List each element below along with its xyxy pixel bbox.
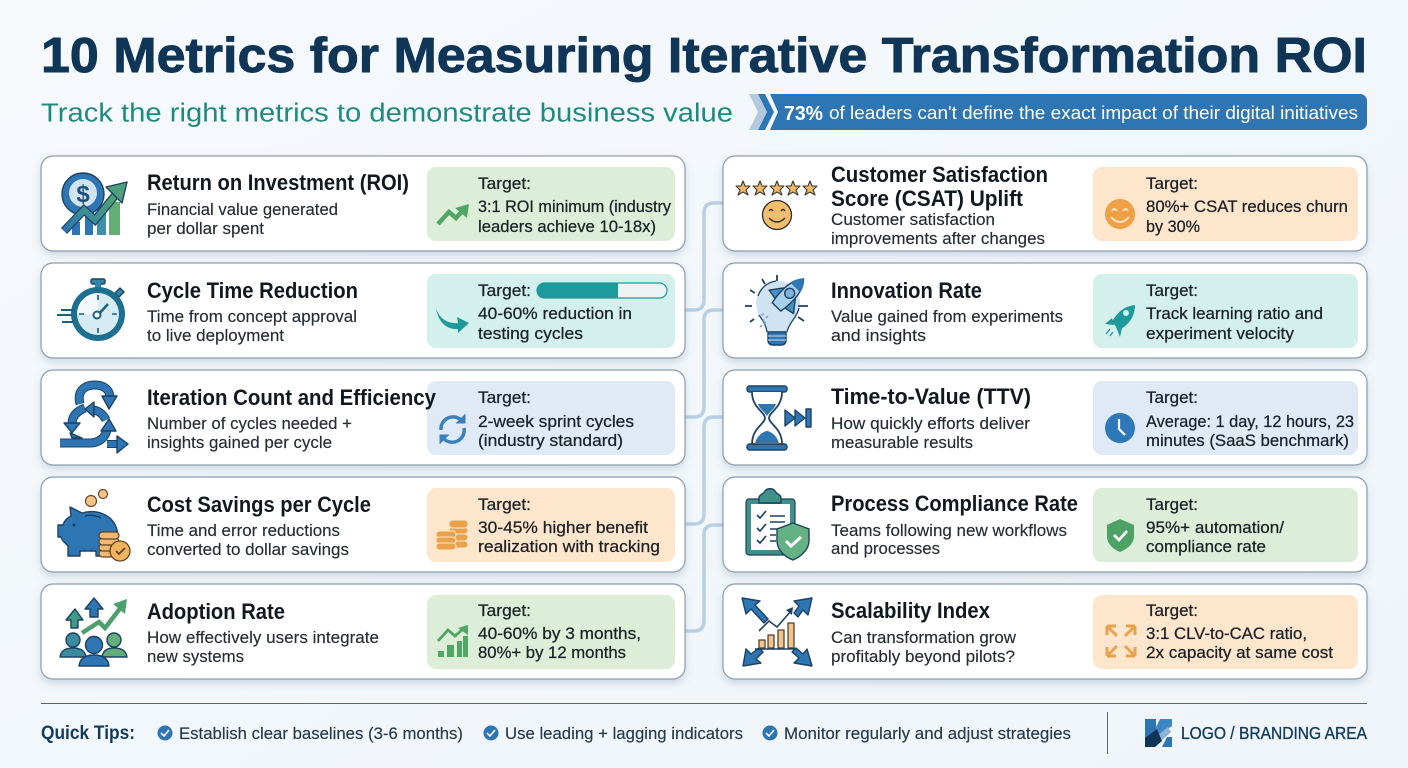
- icon: expand arrows: [1107, 626, 1135, 656]
- callout banner: 73%: [784, 103, 823, 125]
- logo and branding: LOGO / BRANDING AREA: [1181, 723, 1367, 743]
- icon: coin stacks: [436, 520, 468, 550]
- tip 1: Establish clear baselines (3-6 months): [179, 725, 463, 743]
- target box: [1093, 595, 1358, 669]
- subtitle: Track the right metrics to demonstrate business value: [41, 100, 733, 128]
- target box: 95%+ automation/: [1146, 519, 1284, 537]
- target box: experiment velocity: [1146, 325, 1295, 343]
- icon: coin and growth arrow: $: [76, 181, 90, 208]
- title: 10 Metrics for Measuring Iterative Transformation ROI: [41, 29, 1367, 83]
- target box: leaders achieve 10-18x): [478, 218, 656, 236]
- footer divider: [41, 702, 1367, 704]
- metric description: [147, 308, 357, 345]
- metric description: and insights: [831, 327, 926, 345]
- card: Cycle Time Reduction: [41, 263, 685, 358]
- metric description: Customer satisfaction: [831, 211, 995, 229]
- icon: hourglass with fast-forward: [747, 386, 811, 450]
- callout banner: of leaders can't define the exact impact of their digital initiatives: [829, 103, 1358, 123]
- metric description: converted to dollar savings: [147, 541, 349, 559]
- target box: [1093, 381, 1358, 455]
- icon: stopwatch: [57, 279, 125, 341]
- target box: 80%+ CSAT reduces churn: [1146, 198, 1348, 216]
- icon: logo mark: [1145, 719, 1172, 747]
- metric description: [147, 522, 349, 559]
- metric description: [147, 629, 379, 666]
- metric description: [147, 415, 352, 452]
- card: Customer Satisfaction Score: [723, 156, 1367, 251]
- metric description: [831, 629, 1016, 666]
- target box: minutes (SaaS benchmark): [1146, 432, 1349, 450]
- metric title: Adoption Rate: [147, 599, 285, 624]
- metric description: new systems: [147, 648, 244, 666]
- metric description: Time from concept approval: [147, 308, 357, 326]
- icon: piggy bank: [58, 490, 130, 561]
- metric description: [831, 415, 1031, 452]
- metric title: Return on Investment (ROI): [147, 170, 409, 195]
- metric description: Value gained from experiments: [831, 308, 1063, 326]
- metric title: Customer Satisfaction: [831, 162, 1048, 187]
- target box: (industry standard): [478, 432, 623, 450]
- target box: 2-week sprint cycles: [478, 413, 634, 431]
- card: Scalability Index: [723, 584, 1367, 679]
- icon: rocket: [1105, 305, 1135, 337]
- metric description: and processes: [831, 540, 940, 558]
- target box: compliance rate: [1146, 538, 1266, 556]
- metric description: measurable results: [831, 434, 973, 452]
- metric description: to live deployment: [147, 327, 284, 345]
- target box: 3:1 ROI minimum (industry: [478, 198, 672, 216]
- target box: 3:1 CLV-to-CAC ratio,: [1146, 625, 1307, 643]
- quick tips: Quick Tips:: [41, 723, 135, 744]
- target box: Target:: [478, 282, 531, 300]
- target box: 40-60% by 3 months,: [478, 625, 641, 643]
- target box: testing cycles: [478, 325, 583, 343]
- target box: Target:: [1146, 389, 1198, 407]
- target box: [427, 381, 675, 455]
- icon: bar chart with arrow: [438, 625, 468, 657]
- card: Return on Investment: [41, 156, 685, 251]
- icon: clipboard with shield: [746, 489, 809, 560]
- card: Time-to-Value: [723, 370, 1367, 465]
- logo and branding: [1145, 719, 1367, 747]
- target box: Track learning ratio and: [1146, 305, 1323, 323]
- target box: Target:: [1146, 496, 1198, 514]
- target box: Average: 1 day, 12 hours, 23: [1146, 413, 1354, 431]
- metric description: insights gained per cycle: [147, 434, 332, 452]
- card: Innovation Rate: [723, 263, 1367, 358]
- tip 2: Use leading + lagging indicators: [505, 725, 743, 743]
- metric description: Can transformation grow: [831, 629, 1016, 647]
- progress bar: [537, 283, 667, 298]
- metric description: Number of cycles needed +: [147, 415, 352, 433]
- metric description: [831, 308, 1063, 345]
- target box: [427, 167, 675, 241]
- metric title: Iteration Count and Efficiency: [147, 385, 437, 410]
- metric title: Time-to-Value (TTV): [831, 384, 1031, 409]
- target box: [1093, 274, 1358, 348]
- card: Process Compliance Rate: [723, 477, 1367, 572]
- target box: by 30%: [1146, 218, 1200, 236]
- icon: down arrow: [436, 308, 469, 333]
- metric description: [831, 211, 1045, 248]
- target box: realization with tracking: [478, 538, 660, 556]
- icon: expanding arrows with bars: [742, 598, 812, 666]
- icon: sync arrows: [440, 414, 465, 444]
- target box: 80%+ by 12 months: [478, 644, 626, 662]
- metric title: Cost Savings per Cycle: [147, 492, 371, 517]
- target box: Target:: [478, 389, 531, 407]
- metric title: Innovation Rate: [831, 278, 982, 303]
- icon: smiley: [1105, 199, 1135, 229]
- target box: [1093, 167, 1358, 241]
- target box: [427, 488, 675, 562]
- metric description: [831, 522, 1067, 558]
- target box: 30-45% higher benefit: [478, 519, 648, 537]
- icon: people with rising arrows: [60, 598, 127, 666]
- icon: rocket in lightbulb: [745, 267, 816, 345]
- target box: [427, 274, 675, 348]
- target box: Target:: [478, 602, 531, 620]
- target box: Target:: [1146, 602, 1198, 620]
- icon: trend arrow: [438, 208, 465, 224]
- metric description: profitably beyond pilots?: [831, 648, 1015, 666]
- metric title: [831, 162, 1048, 211]
- card: Adoption Rate: [41, 584, 685, 679]
- metric description: Teams following new workflows: [831, 522, 1067, 540]
- metric description: Time and error reductions: [147, 522, 340, 540]
- target box: 2x capacity at same cost: [1146, 644, 1333, 662]
- target box: [1093, 488, 1358, 562]
- icon: stars and smiley: [736, 181, 817, 230]
- connectors between columns: [685, 203, 723, 631]
- target box: [427, 595, 675, 669]
- metric description: [147, 201, 338, 238]
- target box: 40-60% reduction in: [478, 305, 632, 323]
- icon: shield: [1107, 519, 1134, 552]
- tip 3: Monitor regularly and adjust strategies: [784, 725, 1071, 743]
- metric title: Cycle Time Reduction: [147, 278, 358, 303]
- metric title: Scalability Index: [831, 598, 991, 623]
- metric description: improvements after changes: [831, 230, 1045, 248]
- metric description: How effectively users integrate: [147, 629, 379, 647]
- metric description: How quickly efforts deliver: [831, 415, 1031, 433]
- metric description: per dollar spent: [147, 220, 264, 238]
- quick tips: [41, 723, 1071, 744]
- metric description: Financial value generated: [147, 201, 338, 219]
- metric title: Process Compliance Rate: [831, 491, 1078, 516]
- target box: Target:: [1146, 282, 1198, 300]
- icon: clock: [1105, 413, 1135, 443]
- callout banner: [749, 94, 1367, 130]
- card: Cost Savings per Cycle: [41, 477, 685, 572]
- icon: iteration arrows: [60, 385, 128, 453]
- metric title: Score (CSAT) Uplift: [831, 186, 1024, 211]
- icon: coin and growth arrow: [62, 173, 127, 235]
- target box: Target:: [478, 496, 531, 514]
- card: Iteration Count and Efficiency: [41, 370, 685, 465]
- target box: Target:: [1146, 175, 1198, 193]
- target box: Target:: [478, 175, 531, 193]
